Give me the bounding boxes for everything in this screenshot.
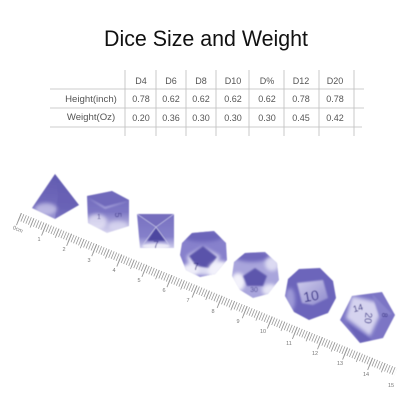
icon: D20 die [340,292,396,344]
size and weight table: 0.20 [132,113,150,123]
ruler: 3 [87,258,91,264]
size and weight table: 0.78 [132,94,150,104]
icon: D20 die: 14 [352,302,364,314]
icon: D% die [232,251,280,298]
icon: D8 die: 7 [153,240,159,251]
ruler: 9 [236,319,240,325]
ruler: 4 [112,268,116,274]
size and weight table: 0.45 [292,113,310,123]
icon: D6 die: 1 [97,214,101,221]
size and weight table: 0.62 [192,94,210,104]
size and weight table: D6 [165,76,177,86]
ruler: 15 [388,383,394,389]
ruler: 10 [260,329,266,335]
size and weight table: D4 [135,76,147,86]
size and weight table: D8 [195,76,207,86]
size and weight table: D10 [225,76,241,86]
ruler: 0cm [12,225,24,235]
icon: D8 die [136,213,175,248]
icon: D10 die [180,230,228,278]
size and weight table: Height(inch) [65,94,117,105]
ruler: 14 [363,372,369,378]
size and weight table: 0.30 [258,113,276,123]
icon: D12 die [283,266,338,322]
size and weight table: 0.36 [162,113,180,123]
size and weight table: 0.62 [224,94,242,104]
size and weight table: 0.62 [162,94,180,104]
ruler: 13 [337,361,343,367]
ruler [12,217,396,389]
icon: D12 die: 10 [302,287,320,305]
size and weight table [50,70,364,136]
icon: D6 die [85,189,131,235]
ruler: 1 [37,237,41,243]
size and weight table: D% [260,76,274,86]
icon: D% die: 30 [250,287,258,294]
icon: D20 die: 20 [361,312,373,324]
ruler: 2 [62,247,66,253]
size and weight table: D20 [327,76,343,86]
ruler: 7 [186,298,190,304]
ruler: 8 [211,309,215,315]
size and weight table: 0.78 [292,94,310,104]
icon: D10 die: 7 [193,262,199,273]
ruler: 6 [162,288,166,294]
icon: D6 die: 5 [113,212,123,218]
icon: D4 die [32,174,80,220]
title: Dice Size and Weight [104,26,309,51]
size and weight table: D12 [293,76,309,86]
size and weight table: 0.42 [326,113,344,123]
size and weight table: Weight(Oz) [67,112,115,123]
ruler: 5 [137,278,141,284]
size and weight table: 0.30 [192,113,210,123]
size and weight table: 0.62 [258,94,276,104]
ruler: 12 [312,351,318,357]
icon: D20 die: 8 [380,312,389,318]
ruler: 11 [286,341,292,347]
size and weight table: 0.30 [224,113,242,123]
size and weight table: 0.78 [326,94,344,104]
